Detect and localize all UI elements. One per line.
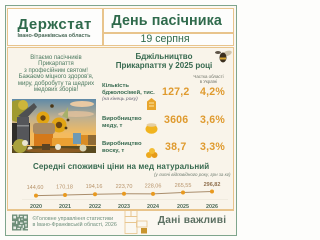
greeting text: Бажаємо міцного здоров'я, [19, 74, 93, 80]
stat row: colonies [102, 83, 225, 102]
line chart: 2025 [177, 204, 189, 210]
line chart: 144,60 [27, 185, 43, 191]
wax share: 3,3% [200, 141, 225, 153]
stat row: honey [102, 114, 225, 129]
honey label: меду, т [102, 123, 122, 129]
honey label [102, 116, 142, 129]
icon: bee [215, 50, 232, 62]
share column label [193, 74, 224, 84]
line chart: 194,16 [86, 184, 102, 190]
wax value: 38,7 [165, 141, 186, 153]
line chart: 223,70 [116, 184, 132, 190]
chart title: Середні споживчі ціни на мед натуральний [33, 162, 209, 171]
footer divider [7, 210, 234, 211]
title panel [103, 8, 234, 33]
title: День пасічника [112, 12, 222, 28]
colonies label: бджолосімей, тис. [102, 90, 155, 96]
colonies value: 127,2 [162, 86, 190, 98]
greeting text: медових зборів! [34, 87, 78, 93]
chart subtitle: (у липні відповідного року, грн за кг) [154, 172, 230, 177]
line chart: 2020 [30, 204, 42, 210]
logo subtitle: Івано-Франківська область [18, 33, 90, 39]
honey share: 3,6% [200, 114, 225, 126]
icon: beehive [147, 98, 156, 110]
share column label: Частка області [193, 74, 224, 78]
main panel [7, 47, 234, 210]
greeting text: миру, добробуту та щедрих [18, 81, 94, 87]
date: 19 серпня [140, 33, 190, 45]
colonies label: Кількість [102, 83, 129, 89]
line chart: 228,06 [145, 184, 161, 190]
section heading: Бджільництво [135, 52, 192, 61]
footer [12, 211, 226, 234]
greeting text: Вітаємо пасічників [30, 55, 82, 61]
honey label: Виробництво [102, 116, 142, 122]
line chart: 2026 [206, 204, 218, 210]
greeting text: з професійним святом! [24, 68, 88, 74]
line chart [22, 182, 228, 210]
line chart: 2022 [89, 204, 101, 210]
header: Derzhstat logo panel [7, 8, 103, 46]
line chart: 170,18 [56, 185, 73, 191]
copyright [32, 216, 117, 228]
colonies label: (на кінець року) [102, 97, 138, 102]
stat row: wax [102, 140, 225, 154]
logo wordmark: Держстат [18, 16, 92, 32]
date panel [103, 33, 234, 46]
data matters label: Дані важливі [158, 215, 226, 226]
honey value: 3606 [164, 114, 188, 126]
copyright: в Івано-Франківській області, 2026 [32, 222, 117, 228]
wax label: воску, т [102, 148, 124, 154]
line chart: 265,55 [175, 183, 191, 189]
wax label [102, 140, 142, 154]
line chart: 2021 [59, 204, 71, 210]
outer frame [5, 5, 237, 236]
QR code [12, 214, 28, 230]
line chart: 2023 [118, 204, 130, 210]
colonies label [102, 83, 155, 102]
section heading [116, 52, 212, 70]
greeting text: Прикарпаття [38, 61, 74, 67]
photo: honey and sunflowers [12, 99, 96, 153]
share column label: в Україні [200, 78, 217, 84]
decorative squares [124, 211, 148, 234]
icon: honey pot [146, 123, 158, 134]
line chart: 2024 [147, 204, 159, 210]
copyright: ©Головне управління статистики [32, 216, 113, 222]
greeting text [18, 54, 94, 93]
icon: honeycomb [146, 148, 158, 158]
wax label: Виробництво [102, 141, 142, 147]
section heading: Прикарпаття у 2025 році [116, 61, 212, 70]
colonies share: 4,2% [200, 86, 225, 98]
line chart: 296,82 [204, 182, 220, 188]
